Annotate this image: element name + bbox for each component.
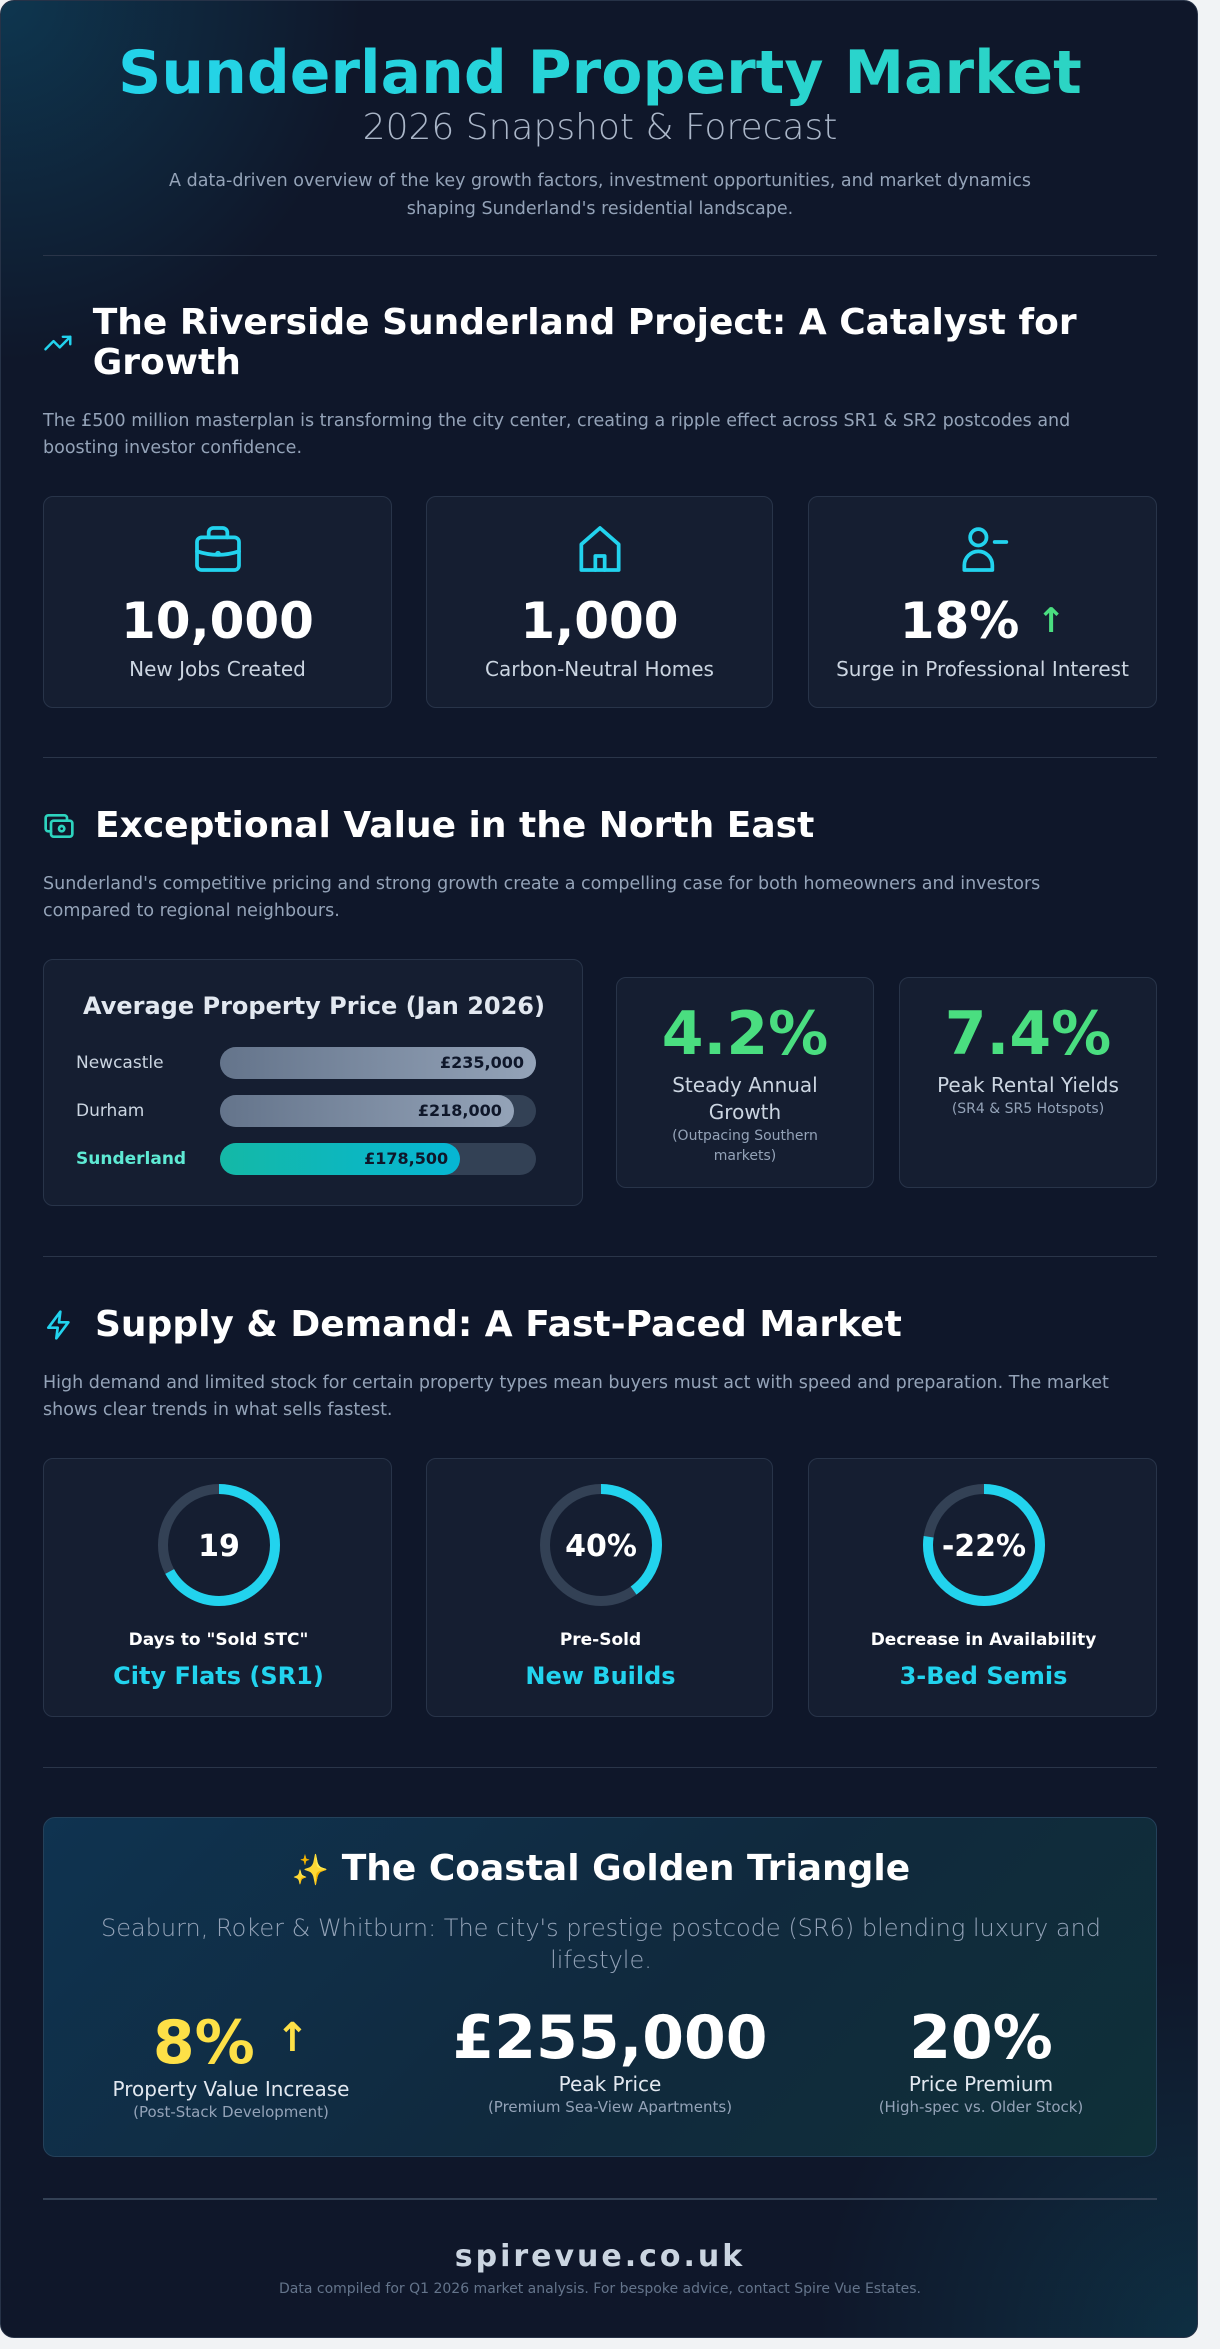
card: ring 40: New Builds — [525, 1662, 676, 1690]
subtitle: 2026 Snapshot & Forecast — [363, 107, 837, 148]
card: ring 40: Pre-Sold — [560, 1630, 641, 1650]
stat: 255000: (Premium Sea-View Apartments) — [488, 2098, 732, 2116]
bar: Sunderland: Sunderland — [76, 1149, 186, 1169]
stat: 20%: (High-spec vs. Older Stock) — [879, 2098, 1083, 2116]
card: jobs: 10,000 — [121, 592, 314, 650]
stat card: growth: (Outpacing Southern — [672, 1128, 818, 1144]
stat card: yields: Peak Rental Yields — [937, 1073, 1119, 1097]
card: ring -22 — [808, 1458, 1157, 1717]
section heading: Riverside: The Riverside Sunderland Project: A Catalyst for Growth — [93, 302, 1077, 383]
intro text: A data-driven overview of the key growth factors, investment opportunities, and market dynamics shaping Sunderland's residential landscape. — [169, 171, 1031, 219]
stat: 255000 — [452, 2003, 768, 2116]
stat: 20%: 20% — [909, 2003, 1053, 2073]
bar: Durham — [76, 1095, 536, 1127]
icon: person — [962, 527, 1008, 572]
ring chart: -22% — [942, 1529, 1026, 1564]
ring chart: 19 — [198, 1529, 240, 1564]
stat card: growth: 4.2% — [662, 999, 828, 1069]
bar: Sunderland — [76, 1143, 536, 1175]
footer brand: spirevue.co.uk — [455, 2239, 745, 2274]
card: interest: 18% ↑ — [900, 592, 1065, 650]
card: ring 19 — [43, 1458, 392, 1717]
bar chart card — [43, 959, 583, 1206]
icon: bolt — [46, 1310, 70, 1340]
stat card: growth: Steady Annual — [672, 1073, 818, 1097]
icon: briefcase — [195, 526, 241, 572]
card: ring 19: Days to "Sold STC" — [129, 1630, 308, 1650]
bar: Newcastle: Newcastle — [76, 1053, 164, 1073]
title: Sunderland Property Market — [118, 38, 1082, 108]
stat: 8%: Property Value Increase — [113, 2077, 349, 2101]
ring chart: 40% — [565, 1529, 637, 1564]
bar: Newcastle: £235,000 — [440, 1053, 524, 1072]
card: interest: Surge in Professional Interest — [836, 657, 1129, 681]
ring chart — [158, 1484, 280, 1606]
stat: 8% — [113, 2008, 349, 2121]
heading: coastal: ✨ The Coastal Golden Triangle — [292, 1848, 910, 1889]
bar: Sunderland: £178,500 — [364, 1149, 448, 1168]
card: interest — [808, 496, 1157, 708]
footer note: Data compiled for Q1 2026 market analysis. For bespoke advice, contact Spire Vue Estates. — [279, 2281, 921, 2297]
stat: 255000: Peak Price — [559, 2072, 661, 2096]
icon: money — [44, 814, 74, 838]
stat: 255000: £255,000 — [452, 2003, 768, 2073]
card: ring -22: 3-Bed Semis — [900, 1662, 1067, 1690]
stat card: yields: 7.4% — [945, 999, 1111, 1069]
stat: 8%: (Post-Stack Development) — [133, 2103, 329, 2121]
stat card: yields: (SR4 & SR5 Hotspots) — [952, 1101, 1104, 1117]
paragraph: supply: High demand and limited stock for certain property types mean buyers must act with speed and preparation. The market shows clear trends in what sells fastest. — [43, 1373, 1109, 1420]
stat card: growth — [616, 977, 874, 1188]
bar: Durham: Durham — [76, 1101, 144, 1121]
bar: Newcastle — [76, 1047, 536, 1079]
card: jobs: New Jobs Created — [129, 657, 306, 681]
stat card: growth: markets) — [714, 1148, 776, 1164]
subtitle: coastal: Seaburn, Roker & Whitburn: The city's prestige postcode (SR6) blending luxury and lifestyle. — [101, 1914, 1101, 1974]
stat card: growth: Growth — [709, 1100, 781, 1124]
paragraph: value: Sunderland's competitive pricing and strong growth create a compelling case for both homeowners and investors compared to regional neighbours. — [43, 874, 1040, 921]
stat card: yields — [899, 977, 1157, 1188]
card: ring -22: Decrease in Availability — [871, 1630, 1096, 1650]
stat: 20%: Price Premium — [909, 2072, 1053, 2096]
section heading: supply: Supply & Demand: A Fast-Paced Market — [95, 1304, 902, 1345]
stat: 8%: 8% ↑ — [153, 2008, 309, 2078]
paragraph: riverside: The £500 million masterplan is transforming the city center, creating a ripple effect across SR1 & SR2 postcodes and boosting investor confidence. — [43, 411, 1070, 458]
icon: house — [579, 526, 621, 572]
icon: trend — [44, 336, 72, 350]
card: homes: 1,000 — [520, 592, 679, 650]
card: homes: Carbon-Neutral Homes — [485, 657, 714, 681]
card: ring 19: City Flats (SR1) — [113, 1662, 324, 1690]
section heading: value: Exceptional Value in the North East — [95, 805, 814, 846]
bar: Durham: £218,000 — [418, 1101, 502, 1120]
card: jobs — [43, 496, 392, 708]
panel: coastal golden triangle — [43, 1817, 1157, 2157]
stat: 20% — [879, 2003, 1083, 2116]
ring chart — [923, 1484, 1045, 1606]
ring chart — [540, 1484, 662, 1606]
chart title: Average Property Price (Jan 2026) — [83, 992, 545, 1020]
card: ring 40 — [426, 1458, 773, 1717]
card: homes — [426, 496, 773, 708]
